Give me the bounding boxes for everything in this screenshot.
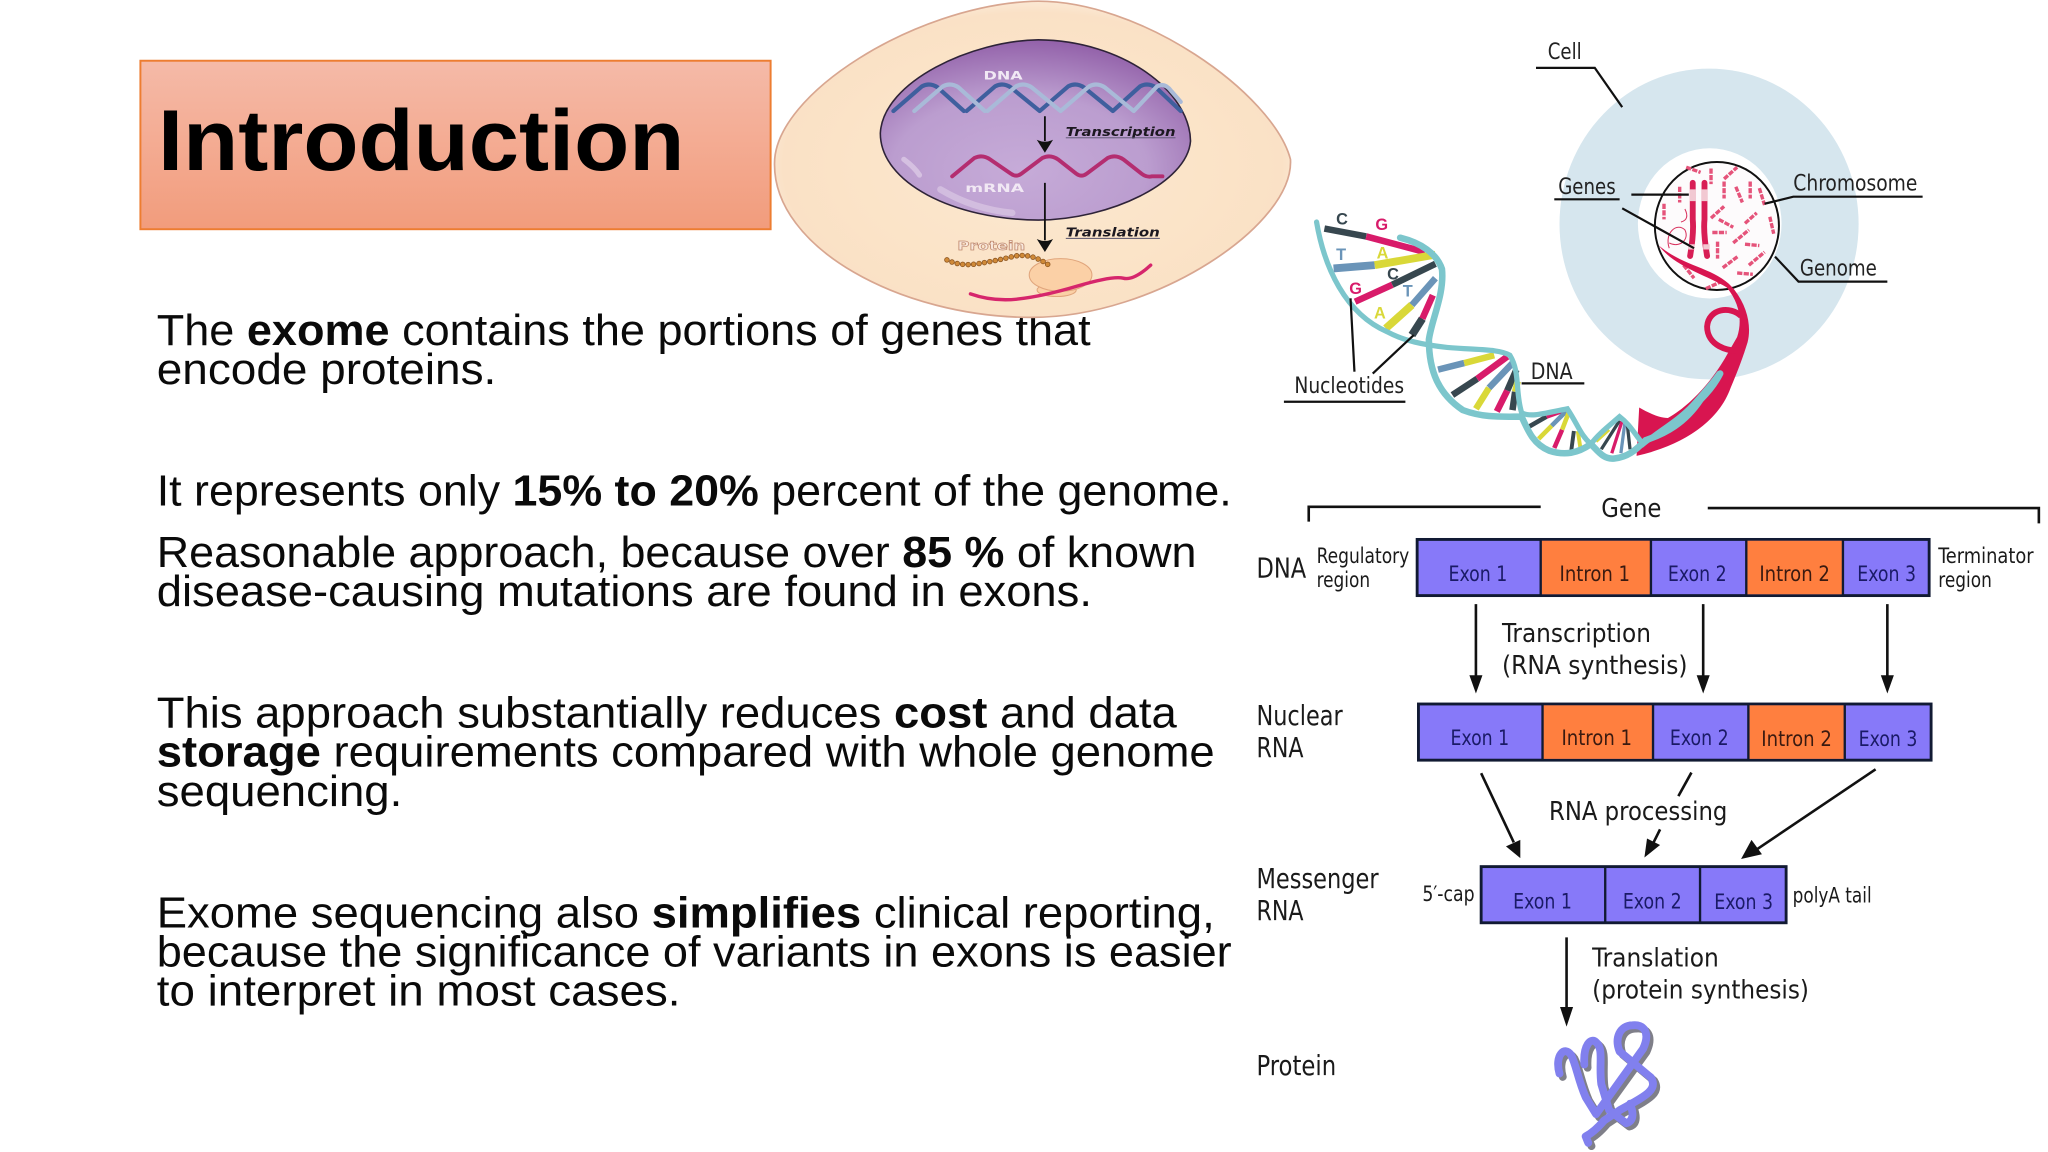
paragraph: cost and storage: This approach substantially reduces cost and data <box>157 690 1177 738</box>
paragraph: exome definition: The exome contains the portions of genes that <box>157 307 1091 355</box>
paragraph: cost and storage: sequencing. <box>157 768 402 816</box>
label: RNA processing: RNA processing <box>1549 797 1727 827</box>
arrows: RNA processing <box>1481 769 1876 859</box>
label: Protein: Protein <box>957 238 1025 253</box>
row: DNA <box>1256 539 2034 596</box>
label: Nucleotides <box>1284 298 1414 402</box>
row: Nuclear RNA: Exon 2 <box>1670 726 1729 750</box>
row: DNA: Exon 1 <box>1448 562 1507 586</box>
label: Genes <box>1554 174 1694 248</box>
row: Messenger RNA: RNA <box>1256 896 1304 927</box>
nucleotide letters: C <box>1387 266 1399 284</box>
row: Nuclear RNA: RNA <box>1256 733 1304 764</box>
gene bracket: Gene <box>1601 494 1661 524</box>
nucleus highlights <box>904 159 1012 213</box>
row: Messenger RNA <box>1256 864 1872 927</box>
chromosomes <box>1664 167 1774 289</box>
nucleotide letters: A <box>1377 245 1389 263</box>
icon: folded protein <box>1558 1025 1656 1146</box>
paragraph: rationale: disease-causing mutations are found in exons. <box>157 568 1092 616</box>
DNA strands <box>1317 222 1720 459</box>
row: Messenger RNA: Exon 2 <box>1623 889 1682 913</box>
nucleotide letters <box>1336 211 1413 323</box>
DNA helix <box>893 85 1181 111</box>
nucleotide letters: T <box>1336 246 1346 264</box>
label: Chromosome: Chromosome <box>1793 171 1917 197</box>
paragraph: clinical reporting: because the significance of variants in exons is easier <box>157 929 1232 977</box>
label: Transcription: Transcription <box>1066 124 1176 139</box>
paragraph: exome definition: encode proteins. <box>157 346 496 394</box>
nucleotide letters: G <box>1375 216 1388 234</box>
row: DNA: Exon 3 <box>1857 562 1916 586</box>
row: Messenger RNA: Messenger <box>1256 864 1379 895</box>
mRNA strand <box>952 156 1162 177</box>
label: Translation (protein synthesis): Translation <box>1591 944 1719 974</box>
paragraph: share of genome: It represents only 15% to 20% percent of the genome. <box>157 467 1232 515</box>
label: Translation: Translation <box>1066 224 1160 239</box>
nucleotide letters: G <box>1349 280 1362 298</box>
row: Nuclear RNA: Intron 1 <box>1561 726 1632 750</box>
chromatin ribbon <box>1637 246 1749 456</box>
paragraph: rationale <box>157 529 1196 616</box>
arrows: transcription <box>1469 604 1894 694</box>
cell <box>1560 69 1859 379</box>
nucleus outline <box>1655 162 1779 290</box>
cell body <box>775 1 1291 317</box>
row: DNA: Exon 2 <box>1668 562 1727 586</box>
paragraph: exome definition <box>157 307 1091 394</box>
title box <box>140 61 771 229</box>
body text <box>157 307 1232 1016</box>
row: Messenger RNA: polyA tail <box>1793 884 1872 908</box>
illustration: cell to DNA <box>1284 39 1923 459</box>
diagram: gene expression <box>1256 494 2039 1146</box>
nucleotide letters: T <box>1403 282 1413 300</box>
row: Messenger RNA: 5′-cap <box>1422 882 1475 906</box>
row: DNA: Regulatory <box>1317 544 1409 568</box>
nucleotide letters: A <box>1374 305 1386 323</box>
row: Nuclear RNA: Exon 1 <box>1450 726 1509 750</box>
ribosome <box>1029 259 1092 296</box>
row: DNA: region <box>1938 568 1992 592</box>
row: Nuclear RNA <box>1256 701 1931 764</box>
title: Introduction <box>158 93 684 189</box>
gene coil <box>1668 209 1687 248</box>
label: Nucleotides: Nucleotides <box>1294 373 1404 399</box>
large chromosome <box>1688 183 1710 256</box>
paragraph: clinical reporting: Exome sequencing also simplifies clinical reporting, <box>157 889 1215 937</box>
paragraph: cost and storage <box>157 690 1215 816</box>
label: Cell <box>1536 39 1622 107</box>
arrow: translation <box>1038 183 1051 251</box>
label: Translation (protein synthesis) <box>1591 944 1809 1006</box>
paragraph: clinical reporting <box>157 889 1232 1016</box>
row: Messenger RNA: Exon 3 <box>1714 890 1773 914</box>
label: Genes: Genes <box>1558 174 1616 200</box>
label: Transcription (RNA synthesis): Transcription <box>1501 619 1651 649</box>
paragraph: rationale: Reasonable approach, because over 85 % of known <box>157 529 1196 577</box>
illustration: cell central dogma <box>775 1 1291 317</box>
row: Nuclear RNA: Nuclear <box>1256 701 1343 732</box>
nucleotide letters: C <box>1336 211 1348 229</box>
label: DNA: DNA <box>984 69 1024 83</box>
row: Nuclear RNA: Intron 2 <box>1761 727 1832 751</box>
label: Translation (protein synthesis): (protein synthesis) <box>1592 976 1809 1006</box>
arrow: transcription <box>1038 116 1051 152</box>
paragraph: clinical reporting: to interpret in most cases. <box>157 968 680 1016</box>
paragraph: cost and storage: storage requirements compared with whole genome <box>157 729 1215 777</box>
row: DNA: Intron 1 <box>1560 562 1630 586</box>
row: DNA: Terminator <box>1937 544 2034 568</box>
gene bracket <box>1309 494 2039 524</box>
label: Transcription (RNA synthesis) <box>1501 619 1688 681</box>
row: Nuclear RNA: Exon 3 <box>1859 727 1917 751</box>
label: DNA: DNA <box>1531 359 1573 385</box>
row: DNA: region <box>1317 568 1370 592</box>
label: mRNA: mRNA <box>965 181 1025 195</box>
arrow: translation <box>1560 937 1573 1027</box>
row: DNA: DNA <box>1256 553 1306 584</box>
label: Chromosome <box>1765 171 1923 204</box>
nucleus halo <box>1638 148 1782 298</box>
protein bead chain <box>947 255 1049 265</box>
label: Protein: Protein <box>1256 1051 1336 1082</box>
label: Transcription (RNA synthesis): (RNA synthesis) <box>1502 651 1688 681</box>
mRNA on ribosome <box>970 265 1151 300</box>
label: Cell: Cell <box>1548 39 1582 65</box>
row: DNA: Intron 2 <box>1759 562 1830 586</box>
DNA base pairs <box>1324 229 1630 453</box>
nucleus <box>880 40 1191 220</box>
label: Genome: Genome <box>1800 256 1877 282</box>
row: Messenger RNA: Exon 1 <box>1513 889 1572 913</box>
